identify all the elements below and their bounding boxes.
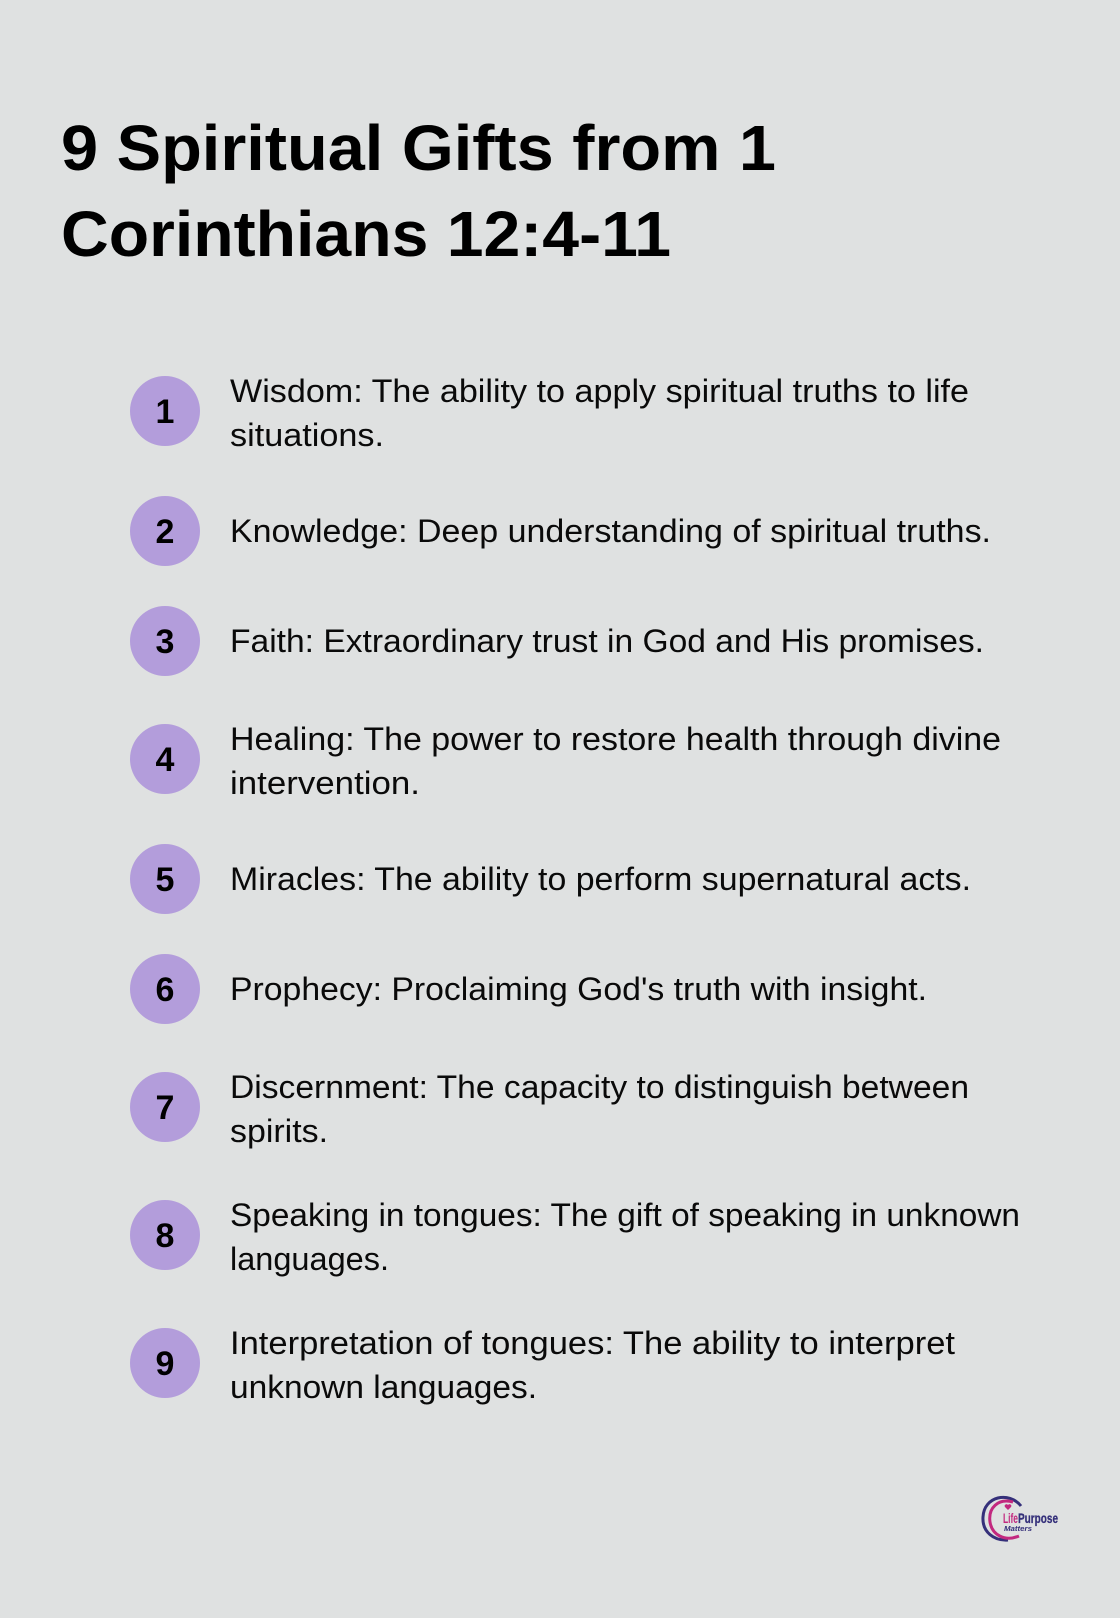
title: Corinthians 12:4-11 [61, 198, 671, 270]
item 4: healing: intervention. [230, 765, 420, 801]
item 3: faith: Faith: Extraordinary trust in God and His promises. [230, 623, 984, 659]
item 8: speaking in tongues: Speaking in tongues: The gift of speaking in unknown [230, 1197, 1020, 1233]
item 6: prophecy: 6 [156, 971, 174, 1009]
item 9: interpretation of tongues: Interpretation of tongues: The ability to interpret [230, 1325, 955, 1361]
item 9: interpretation of tongues: 9 [156, 1345, 174, 1383]
item 8: speaking in tongues: 8 [156, 1217, 174, 1255]
logo: Life Purpose Matters: Life [1003, 1510, 1018, 1526]
logo: Life Purpose Matters: Matters [1004, 1526, 1032, 1533]
item 5: miracles [130, 844, 971, 914]
title: 9 Spiritual Gifts from 1 [61, 112, 776, 184]
item 7: discernment: Discernment: The capacity to distinguish between [230, 1069, 969, 1105]
list of gifts [130, 373, 1020, 1405]
item 1: wisdom: 1 [156, 393, 174, 431]
title [61, 112, 776, 270]
item 4: healing [130, 721, 1001, 801]
item 7: discernment [130, 1069, 969, 1149]
item 1: wisdom: Wisdom: The ability to apply spiritual truths to life [230, 373, 969, 409]
item 6: prophecy: Prophecy: Proclaiming God's truth with insight. [230, 971, 927, 1007]
item 6: prophecy [130, 954, 927, 1024]
item 2: knowledge [130, 496, 991, 566]
item 7: discernment: spirits. [230, 1113, 328, 1149]
item 4: healing: Healing: The power to restore health through divine [230, 721, 1001, 757]
item 7: discernment: 7 [156, 1089, 174, 1127]
item 5: miracles: 5 [156, 861, 174, 899]
item 9: interpretation of tongues: unknown languages. [230, 1369, 537, 1405]
item 8: speaking in tongues: languages. [230, 1241, 389, 1277]
item 8: speaking in tongues [130, 1197, 1020, 1277]
item 4: healing: 4 [156, 741, 175, 779]
item 1: wisdom [130, 373, 969, 453]
item 1: wisdom: situations. [230, 417, 384, 453]
item 2: knowledge: 2 [156, 513, 174, 551]
item 3: faith: 3 [156, 623, 174, 661]
item 9: interpretation of tongues [130, 1325, 955, 1405]
item 3: faith [130, 606, 984, 676]
item 2: knowledge: Knowledge: Deep understanding of spiritual truths. [230, 513, 991, 549]
item 5: miracles: Miracles: The ability to perform supernatural acts. [230, 861, 971, 897]
logo: Life Purpose Matters: Purpose [1018, 1510, 1058, 1526]
logo: Life Purpose Matters [983, 1497, 1058, 1540]
